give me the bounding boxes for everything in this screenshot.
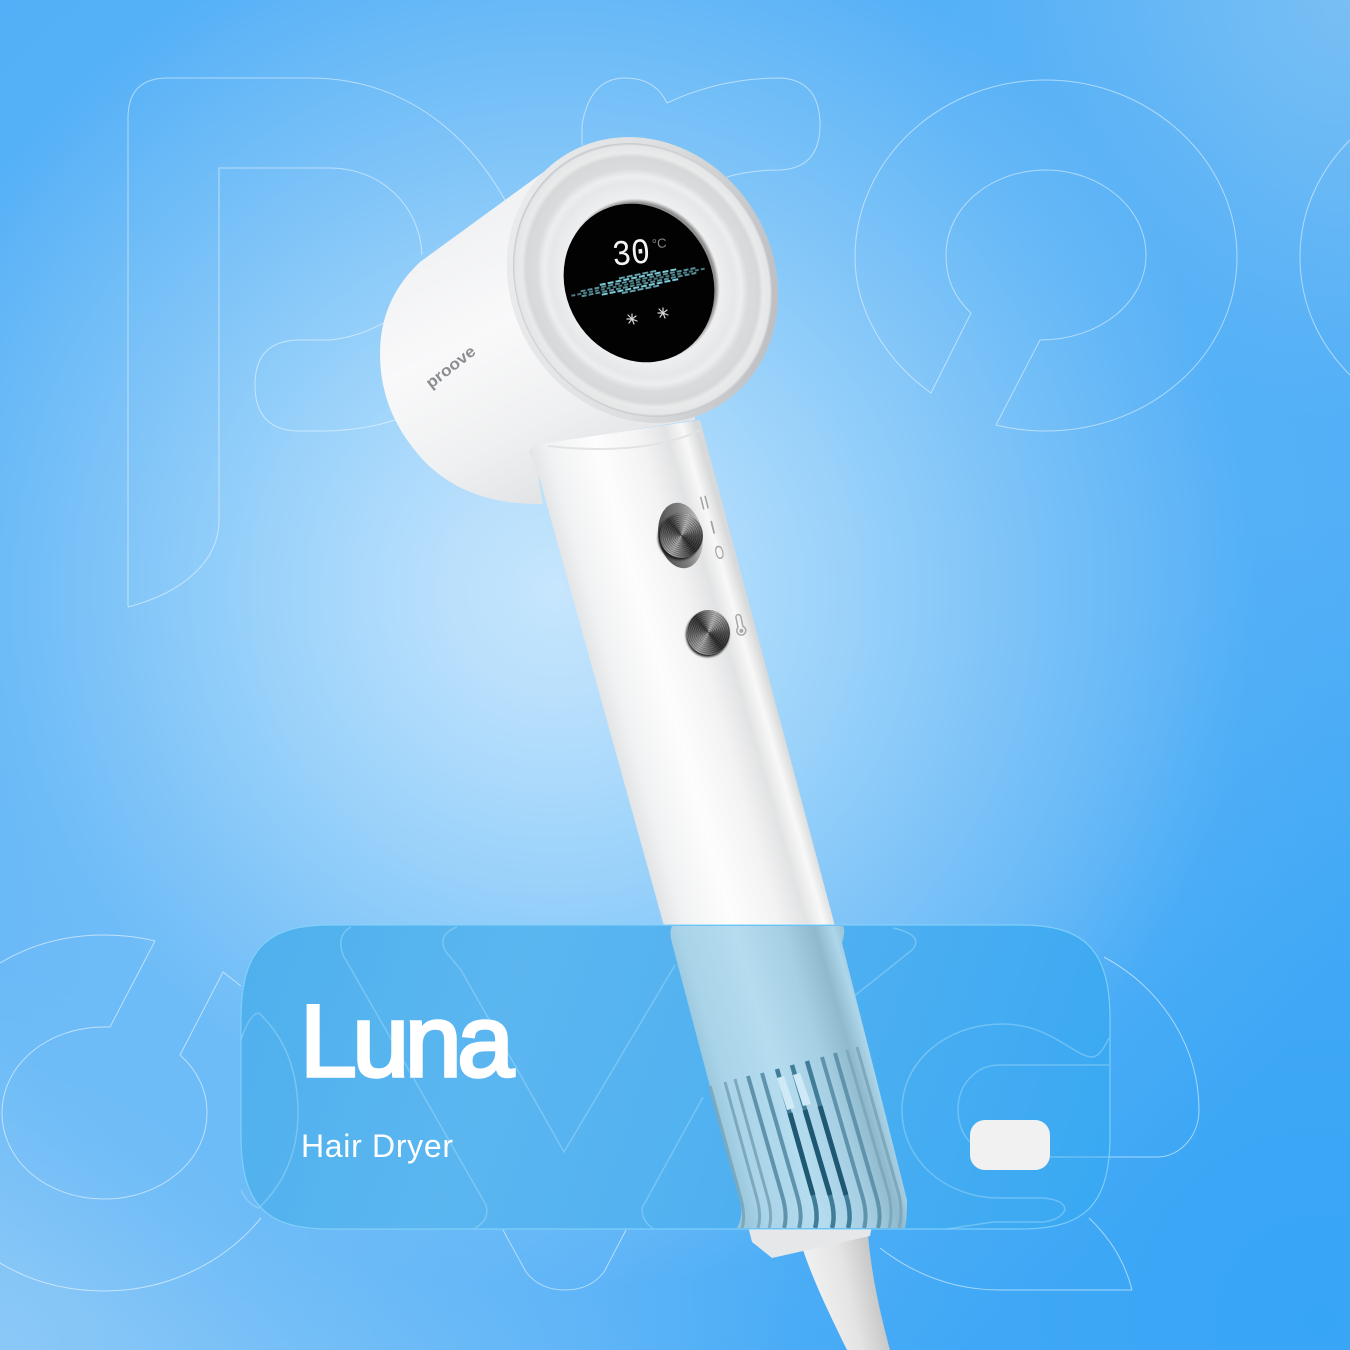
dryer grille (710, 1047, 901, 1228)
icon: thermometer (733, 614, 747, 636)
dryer body cylinder (380, 160, 695, 504)
refracted dryer handle (670, 926, 907, 1228)
speed labels (698, 492, 727, 565)
product name: Luna (300, 984, 514, 1098)
outline letter P (128, 78, 505, 607)
outline letter o (855, 80, 1237, 431)
outline letter e, right part (880, 957, 1199, 1290)
airflow wave display (570, 261, 708, 303)
speed switch slot (653, 499, 708, 572)
outline letter at right edge (1300, 140, 1350, 375)
glass card (241, 925, 1110, 1229)
speed labels: O (713, 542, 727, 565)
speed labels: II (698, 492, 712, 515)
temperature reading: 30 (611, 232, 652, 277)
hair dryer (380, 86, 890, 1350)
fan icon 2 (658, 308, 668, 318)
speed switch knob (660, 513, 703, 558)
temperature knob (687, 610, 730, 655)
white pill button (970, 1120, 1050, 1170)
refracted outline lettering (241, 927, 1109, 1229)
card border (241, 925, 1110, 1229)
product type: Hair Dryer (301, 1128, 453, 1164)
outline letter v, lower part (503, 1230, 626, 1290)
dryer base collar (748, 1226, 872, 1258)
power cable (803, 1235, 890, 1350)
speed labels: I (708, 517, 718, 539)
outline lettering: top row (128, 78, 1350, 607)
outline letter r (582, 78, 820, 177)
outline letter o, bottom left (0, 935, 261, 1291)
outline lettering: bottom row (0, 935, 1199, 1291)
display screen (534, 175, 744, 391)
card background (241, 925, 1110, 1229)
front disc (454, 86, 831, 474)
fan icon 1 (627, 314, 637, 324)
disc rim (458, 91, 827, 469)
dryer handle (528, 420, 835, 926)
degree symbol: °C (651, 235, 667, 251)
brand name: proove (423, 343, 479, 392)
handle neck shading (548, 430, 700, 449)
